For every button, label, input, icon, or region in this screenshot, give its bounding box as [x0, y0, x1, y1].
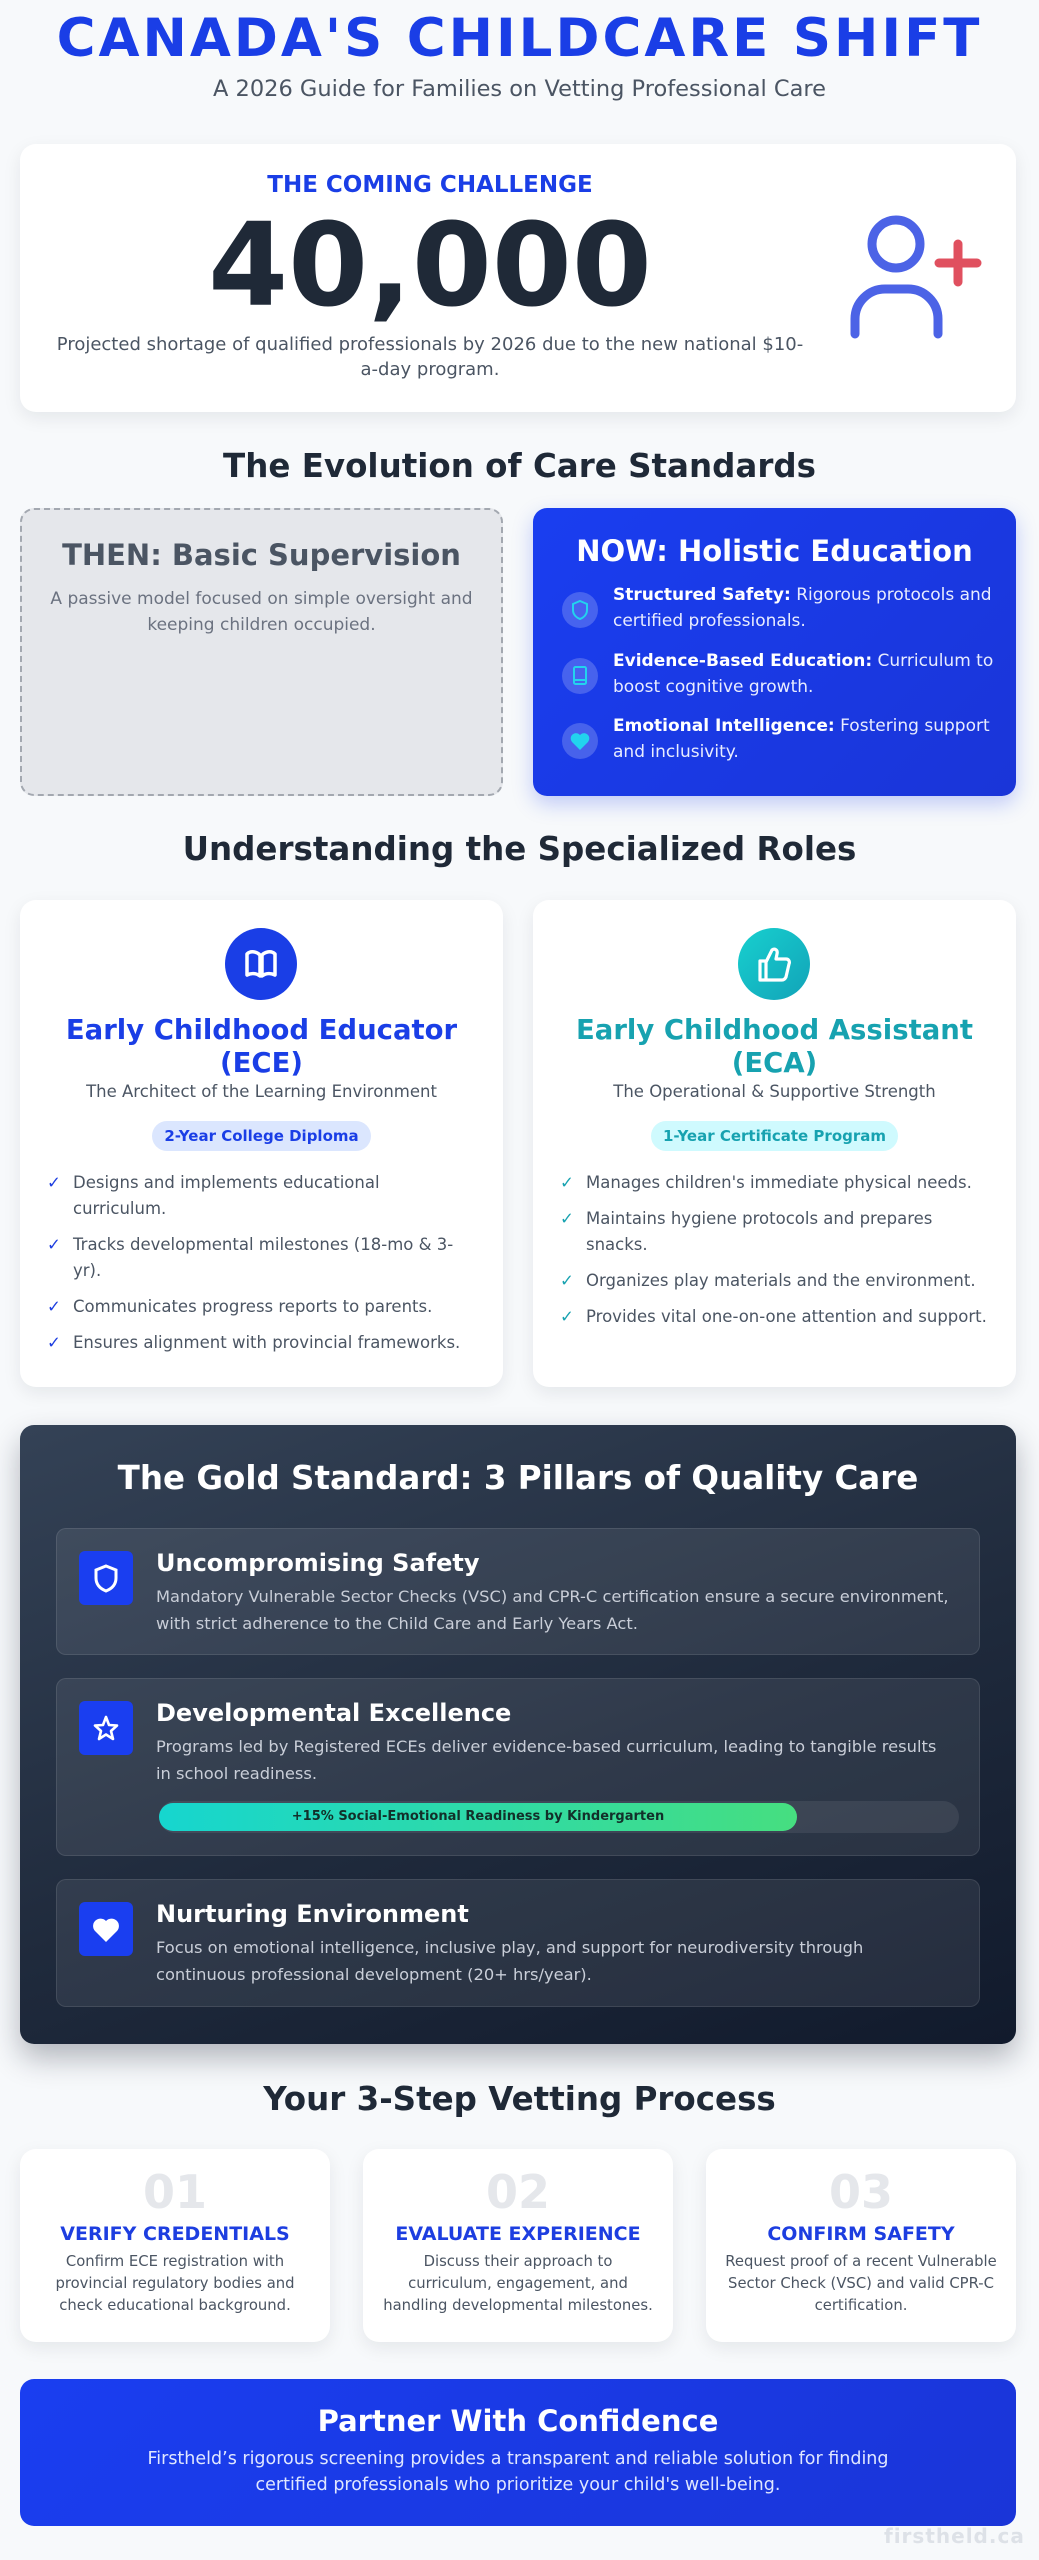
step 1: Confirm ECE registration with [66, 2253, 284, 2270]
heading: vetting: Your 3-Step Vetting Process [263, 2080, 776, 2118]
ECA title: (ECA) [732, 1047, 817, 1079]
step 1 [20, 2149, 330, 2342]
panel: ECE: ✓ [47, 1333, 61, 1352]
label: coming challenge: THE COMING CHALLENGE [267, 172, 593, 198]
step 3: certification. [815, 2297, 907, 2314]
ECA list: Manages children's immediate physical needs. [586, 1173, 972, 1192]
ECE subtitle: The Architect of the Learning Environment [86, 1082, 437, 1101]
icon: user plus [850, 216, 982, 338]
panel: ECE: ✓ [47, 1173, 61, 1192]
icon: thumbs up [738, 928, 810, 1000]
ECE list: Tracks developmental milestones (18-mo & 3-yr). [73, 1235, 453, 1280]
ECA subtitle: The Operational & Supportive Strength [613, 1082, 936, 1101]
panel: ECE: ✓ [47, 1297, 61, 1316]
panel: coming challenge [20, 144, 1016, 412]
pillar: nurturing: Focus on emotional intelligence, inclusive play, and support for neurodiversity through [156, 1938, 863, 1957]
pill: certificate: 1-Year Certificate Program [663, 1127, 886, 1145]
pill: certificate [651, 1121, 898, 1151]
pillar: safety: Uncompromising Safety [156, 1549, 479, 1577]
ECA title [576, 1014, 973, 1079]
description [57, 334, 803, 380]
pillar: safety: with strict adherence to the Child Care and Early Years Act. [156, 1614, 638, 1633]
step 2: curriculum, engagement, and [408, 2275, 628, 2292]
heading: roles: Understanding the Specialized Roles [183, 830, 856, 868]
panel: ECA: ✓ [560, 1173, 574, 1192]
subtitle: A 2026 Guide for Families on Vetting Professional Care [213, 76, 826, 102]
panel: ECA: ✓ [560, 1307, 574, 1326]
pillar: development: Developmental Excellence [156, 1699, 511, 1727]
pillar: development: Programs led by Registered ECEs deliver evidence-based curriculum, leading to tangible results [156, 1737, 936, 1756]
now title: NOW: Holistic Education [576, 534, 973, 568]
step 1: 01 [143, 2165, 207, 2219]
ECE list: Ensures alignment with provincial frameworks. [73, 1333, 460, 1352]
step 2 [363, 2149, 673, 2342]
callout: partner: Partner With Confidence [318, 2404, 718, 2438]
then title: THEN: Basic Supervision [62, 538, 461, 572]
step 3: 03 [829, 2165, 893, 2219]
step 3: Sector Check (VSC) and valid CPR-C [728, 2275, 994, 2292]
ECA list: Organizes play materials and the environment. [586, 1271, 976, 1290]
panel: ECA: ✓ [560, 1271, 574, 1290]
pillar: safety [56, 1528, 980, 1655]
pill: diploma [152, 1121, 371, 1151]
description: Projected shortage of qualified professionals by 2026 due to the new national $10- [57, 334, 803, 355]
panel: ECE: ✓ [47, 1235, 61, 1254]
ECA list: Provides vital one-on-one attention and support. [586, 1307, 987, 1326]
step 3: Request proof of a recent Vulnerable [725, 2253, 997, 2270]
ECA title: Early Childhood Assistant [576, 1014, 973, 1046]
callout: partner: Firstheld’s rigorous screening provides a transparent and reliable solution for finding [147, 2449, 889, 2469]
pillar: nurturing: continuous professional development (20+ hrs/year). [156, 1965, 592, 1984]
icon: shield [562, 592, 598, 628]
pillar: development: in school readiness. [156, 1764, 317, 1783]
icon: star [79, 1701, 133, 1755]
title: CANADA'S CHILDCARE SHIFT [57, 8, 982, 69]
progress bar: +15% Social-Emotional Readiness by Kindergarten [292, 1809, 664, 1824]
panel: ECA: ✓ [560, 1209, 574, 1228]
item: emotional intelligence: Emotional Intelligence: Fostering support and inclusivity. [613, 716, 990, 762]
icon: book open [225, 928, 297, 1000]
callout: partner [20, 2379, 1016, 2526]
icon: shield [79, 1551, 133, 1605]
step 2: EVALUATE EXPERIENCE [395, 2223, 641, 2245]
step 3 [706, 2149, 1016, 2342]
icon: heart [562, 723, 598, 759]
step 2: Discuss their approach to [424, 2253, 612, 2270]
step 1: provincial regulatory bodies and [55, 2275, 295, 2292]
ECE title: Early Childhood Educator [66, 1014, 457, 1046]
panel: ECA [533, 900, 1016, 1387]
progress bar [159, 1801, 959, 1833]
gold title: The Gold Standard: 3 Pillars of Quality Care [118, 1459, 918, 1497]
ECE list [47, 1173, 460, 1352]
then text: A passive model focused on simple oversight and keeping children occupied. [50, 589, 473, 635]
panel: ECE [20, 900, 503, 1387]
pillar: development [56, 1678, 980, 1856]
step 2: handling developmental milestones. [383, 2297, 653, 2314]
pillar: nurturing: Nurturing Environment [156, 1900, 469, 1928]
ECE title [66, 1014, 457, 1079]
panel: now [533, 508, 1016, 796]
pill: diploma: 2-Year College Diploma [164, 1127, 359, 1145]
icon: heart [79, 1902, 133, 1956]
ECA list: Maintains hygiene protocols and prepares snacks. [586, 1209, 932, 1254]
pillar: nurturing [56, 1879, 980, 2007]
ECE list: Communicates progress reports to parents. [73, 1297, 432, 1316]
step 2: 02 [486, 2165, 550, 2219]
footer: brand: firstheld.ca [884, 2524, 1025, 2548]
callout: partner: certified professionals who prioritize your child's well-being. [256, 2475, 780, 2495]
big number: 40,000 [208, 199, 652, 333]
step 1: VERIFY CREDENTIALS [60, 2223, 290, 2245]
description: a-day program. [361, 359, 499, 380]
step 3: CONFIRM SAFETY [767, 2223, 955, 2245]
item: evidence-based: Evidence-Based Education: Curriculum to boost cognitive growth. [613, 651, 993, 697]
panel: gold standard [20, 1425, 1016, 2044]
step 1: check educational background. [59, 2297, 291, 2314]
ECE list: Designs and implements educational curriculum. [73, 1173, 380, 1218]
ECA list [560, 1173, 987, 1326]
heading: evolution: The Evolution of Care Standards [223, 447, 816, 485]
ECE title: (ECE) [220, 1047, 303, 1079]
item: structured safety: Structured Safety: Rigorous protocols and certified professionals. [613, 585, 992, 631]
panel: then [20, 508, 503, 796]
icon: book [562, 658, 598, 694]
pillar: safety: Mandatory Vulnerable Sector Checks (VSC) and CPR-C certification ensure a secure environment, [156, 1587, 949, 1606]
